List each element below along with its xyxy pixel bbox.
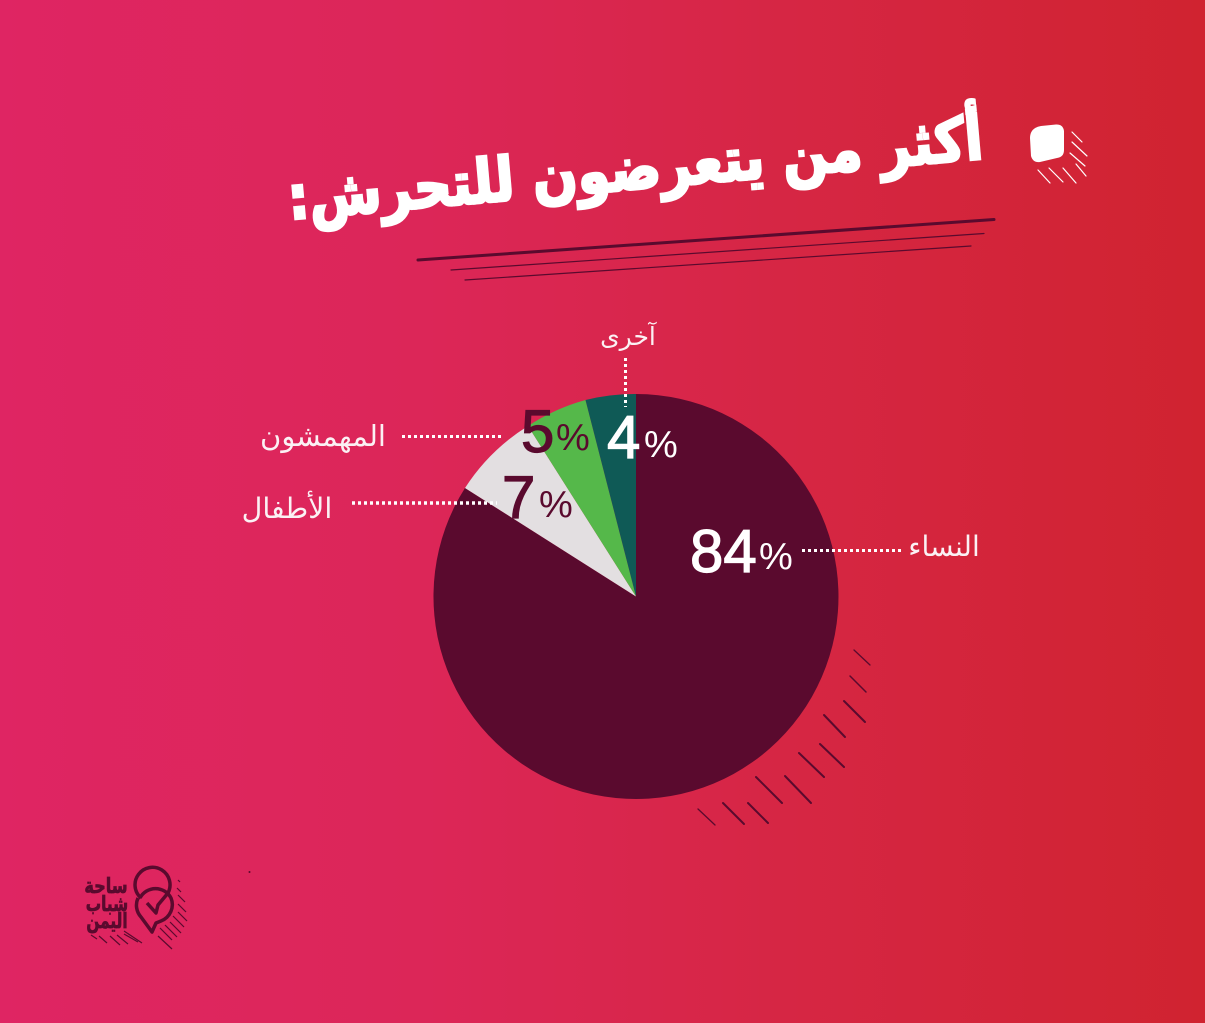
label: marginalized: المهمشون: [260, 419, 386, 453]
leader line: women: [802, 549, 902, 552]
callout: marginalized: [260, 398, 590, 465]
title underlines: [418, 220, 994, 280]
slice: marginalized 5%: [528, 400, 636, 596]
logo text: اليمن: [86, 910, 128, 934]
pie chart: [433, 394, 838, 799]
value: 84%: [690, 518, 793, 585]
value: 84%: 84: [690, 518, 757, 585]
callout: women: [690, 518, 980, 585]
value: 7%: %: [539, 484, 573, 526]
decorative hatch marks around pie: [698, 650, 870, 825]
icon: title marker: [1030, 124, 1087, 183]
value: 4%: 4: [607, 404, 640, 471]
slice: women 84%: [433, 394, 838, 799]
value: 84%: %: [759, 536, 793, 578]
leader line: children: [352, 501, 497, 505]
label: children: الأطفال: [242, 490, 332, 525]
title: [284, 98, 1087, 280]
logo text: شباب: [86, 893, 128, 917]
callout: children: [242, 464, 573, 531]
logo text: ساحة: [84, 874, 128, 899]
value: 4%: %: [644, 424, 678, 466]
stray dot: [248, 871, 250, 873]
callout: other: [600, 321, 678, 471]
value: 4%: [607, 404, 678, 471]
slice: children 7%: [465, 426, 636, 596]
value: 5%: %: [556, 417, 590, 459]
value: 7%: 7: [502, 464, 535, 531]
leader line: marginalized: [402, 435, 503, 438]
icon: speech bubbles: [135, 867, 172, 932]
label: other: آخرى: [600, 321, 657, 351]
value: 5%: 5: [521, 398, 554, 465]
value: 5%: [521, 398, 590, 465]
logo text: [84, 874, 128, 934]
logo hatch marks: [91, 880, 187, 949]
logo: [84, 867, 187, 949]
title text: أكثر من يتعرضون للتحرش:: [284, 98, 986, 234]
slice: other 4%: [586, 394, 636, 596]
value: 7%: [502, 464, 573, 531]
label: women: النساء: [908, 530, 980, 563]
leader line: other: [624, 358, 627, 407]
